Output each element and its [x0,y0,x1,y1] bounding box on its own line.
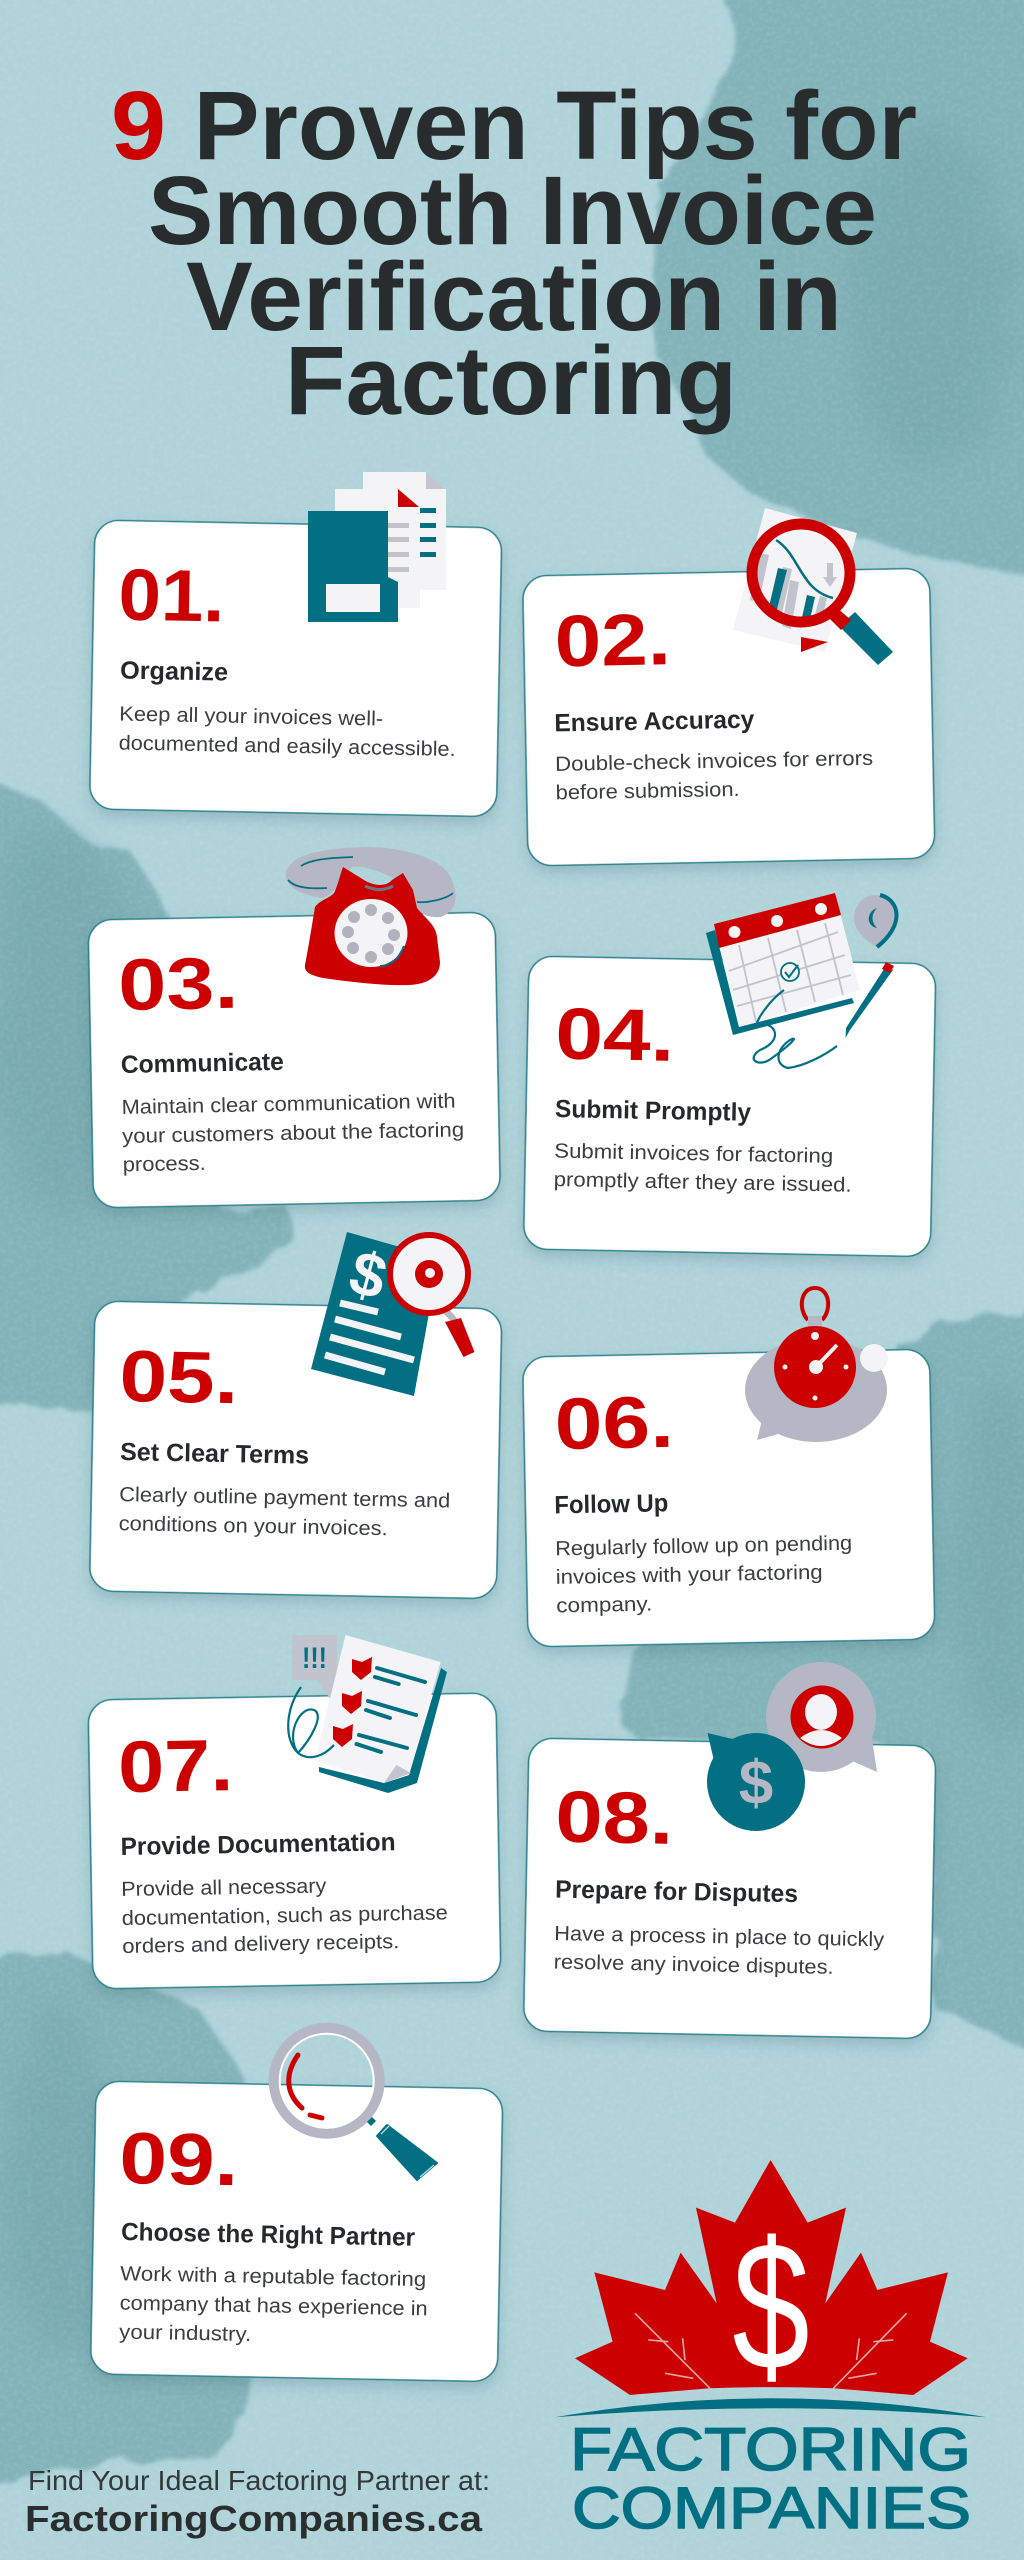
icon: magnifier over chart [733,508,893,665]
panel: tip 02 [522,568,935,866]
number 07: 07. [117,1725,234,1808]
body: Submit Promptly: promptly after they are issued. [553,1168,852,1197]
panel: tip 01 [89,520,502,817]
title: Smooth Invoice [148,156,877,265]
body: Organize: Keep all your invoices well- [119,703,383,731]
footer line: Find Your Ideal Factoring Partner at: [28,2465,490,2496]
icon: calendar, pen and pin [706,893,897,1068]
body: Follow Up: company. [556,1593,652,1617]
panel: tip 07 [88,1693,501,1989]
icon: speech bubbles with person and dollar: $ [739,1749,773,1818]
title [111,71,917,435]
logo: maple leaf [555,2160,987,2417]
body: Communicate: Maintain clear communication with [121,1090,456,1119]
panel: tip 05 [89,1301,502,1599]
icon: invoice with magnifier [311,1232,474,1396]
body: Follow Up: Regularly follow up on pending [555,1532,852,1560]
heading: Organize: Organize [120,657,228,687]
body: Follow Up: invoices with your factoring [556,1561,823,1589]
number 04: 04. [555,994,675,1077]
body: Submit Promptly: Submit invoices for factoring [554,1140,833,1168]
body: Choose the Right Partner: Work with a reputable factoring [120,2262,426,2291]
heading: Choose the Right Partner: Choose the Right Partner [121,2218,416,2252]
footer call to action [25,2465,490,2539]
body: Choose the Right Partner: company that has experience in [120,2291,428,2320]
heading: Follow Up: Follow Up [554,1489,669,1519]
panel: tip 08 [523,1738,936,2039]
body: Choose the Right Partner: your industry. [119,2320,251,2346]
number 09: 09. [119,2118,239,2201]
body: Communicate: your customers about the factoring [122,1118,464,1148]
body: Prepare for Disputes: resolve any invoice disputes. [553,1951,834,1979]
body: Prepare for Disputes: Have a process in place to quickly [554,1922,885,1951]
title: 9 Proven Tips for [111,71,917,180]
panel: tip 06 [522,1349,935,1647]
panel: tip 04 [523,956,936,1257]
heading: Submit Promptly: Submit Promptly [555,1095,751,1127]
number 08: 08. [555,1777,674,1860]
body: Communicate: process. [122,1152,206,1176]
body: Organize: documented and easily accessible. [119,731,456,761]
body: Provide Documentation: orders and delivery receipts. [122,1930,399,1958]
body: Ensure Accuracy: before submission. [555,778,740,804]
heading: Prepare for Disputes: Prepare for Disputes [555,1876,798,1908]
logo: wordmark [570,2416,971,2541]
panel: tip 09 [90,2081,503,2382]
icon: stopwatch on speech bubble [745,1288,888,1442]
body: Set Clear Terms: conditions on your invoices. [119,1512,388,1540]
logo: Factoring Companies [555,2160,987,2541]
icon: red rotary telephone [286,847,456,985]
title: Verification in [186,242,842,351]
body: Set Clear Terms: Clearly outline payment terms and [119,1483,450,1512]
heading: Provide Documentation: Provide Documentation [120,1828,396,1861]
number 05: 05. [119,1336,239,1419]
panel: tip 03 [88,912,500,1208]
icon: speech bubbles with person and dollar [707,1662,877,1831]
number 02: 02. [554,599,672,682]
icon: checklist document: !!! [302,1642,327,1675]
body: Provide Documentation: Provide all necessary [121,1874,327,1901]
body: Ensure Accuracy: Double-check invoices for errors [555,747,873,776]
heading: Communicate: Communicate [121,1048,284,1079]
footer website: FactoringCompanies.ca [25,2498,483,2539]
logo: wordmark: FACTORING [570,2416,971,2483]
body: Provide Documentation: documentation, such as purchase [122,1901,448,1930]
icon: invoice with magnifier: $ [342,1238,394,1313]
heading: Ensure Accuracy: Ensure Accuracy [554,706,755,737]
heading: Set Clear Terms: Set Clear Terms [120,1438,309,1470]
number 03: 03. [117,943,239,1026]
logo: dollar sign: $ [732,2205,810,2408]
icon: checklist document [288,1635,447,1793]
icon: magnifying glass [274,2028,437,2180]
icon: documents and folder [308,472,446,622]
number 01: 01. [118,554,225,637]
title: Factoring [285,326,737,435]
logo: wordmark: COMPANIES [572,2476,971,2541]
number 06: 06. [554,1382,675,1465]
